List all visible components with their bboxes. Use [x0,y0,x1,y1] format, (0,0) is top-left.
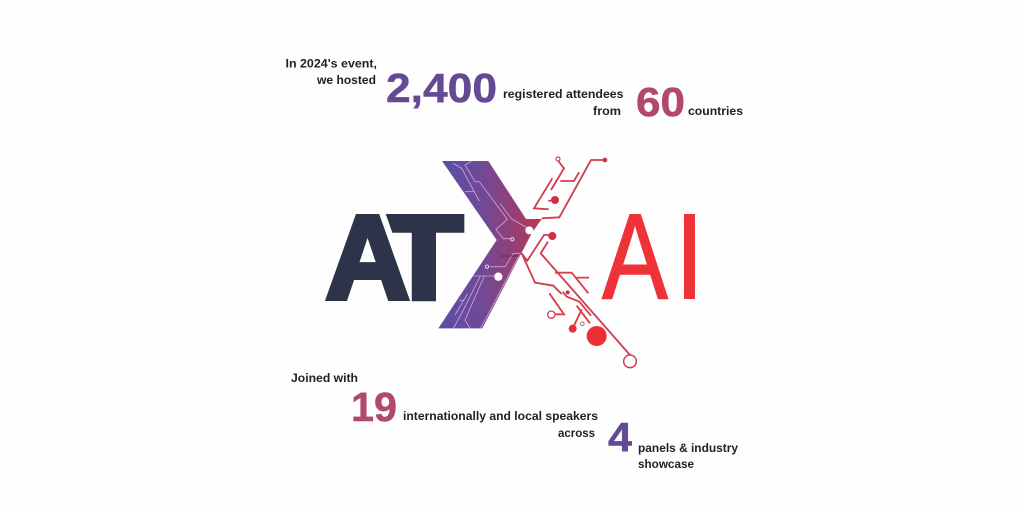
logo: ATX AI [326,157,695,368]
text block: speakers and panels: showcase [638,457,694,471]
logo letter: A: A [326,190,410,324]
text block: 2024 attendees: registered attendees [503,87,624,101]
text block: 2024 attendees: In 2024's event, [286,56,377,70]
logo letters: AI: A [602,189,668,325]
text block: 2024 attendees [286,56,743,125]
circuit nodes on chevron [485,226,533,281]
text block: speakers and panels: Joined with [291,371,358,385]
text block: speakers and panels: across [558,426,595,440]
text block: 2024 attendees: we hosted [316,73,376,87]
stat: 2,400: 2,400 [386,65,497,111]
text block: speakers and panels: panels & industry [638,441,738,455]
text block: speakers and panels [291,371,738,471]
text block: speakers and panels: internationally and local speakers [403,409,598,423]
stat: 4: 4 [608,414,632,460]
logo chevron: X left half with circuit traces [438,161,542,328]
text block: 2024 attendees: countries [688,104,743,118]
stat: 19: 19 [351,384,397,430]
text block: 2024 attendees: from [593,104,621,118]
logo letter: T: T [385,191,463,325]
logo circuit: X right half traces [522,157,636,368]
stat: 60: 60 [636,79,685,125]
